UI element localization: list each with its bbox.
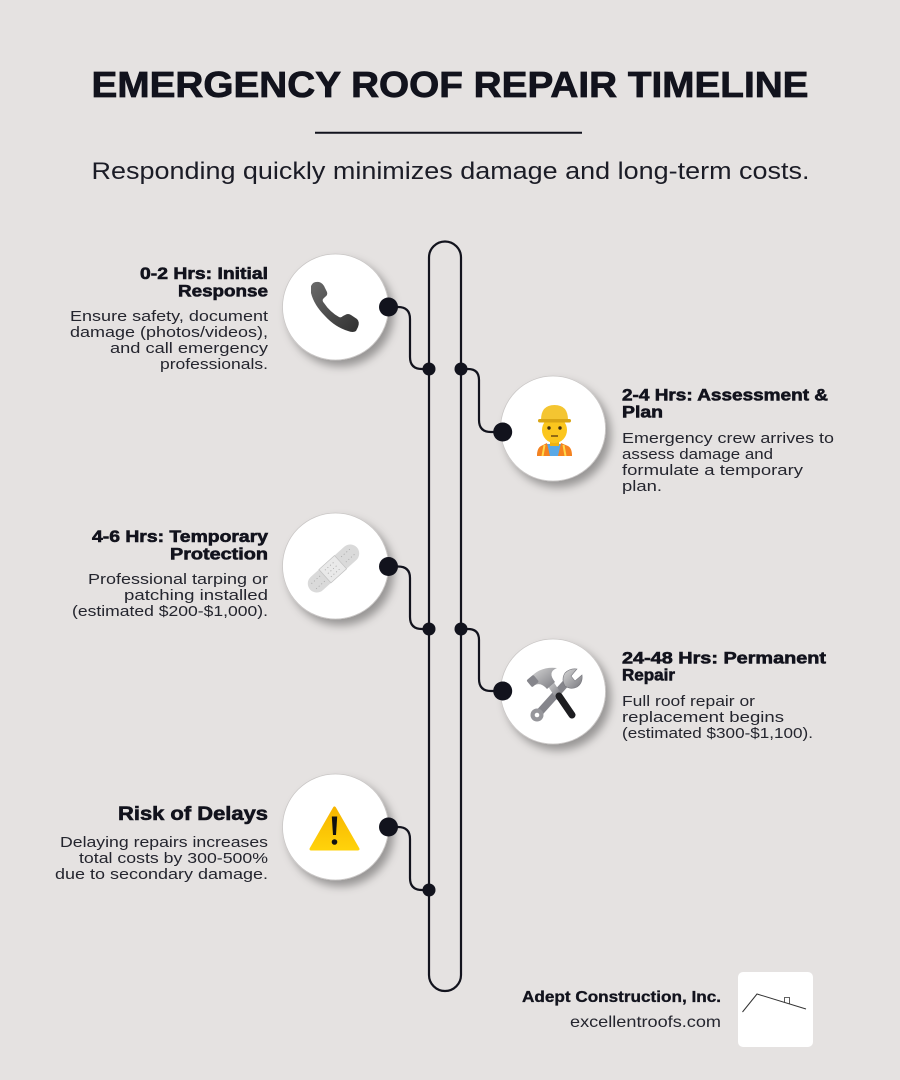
connector: 2-4 hours — [454, 362, 512, 442]
step: 0-2 hours — [70, 254, 436, 376]
heading: 24-48 hours: Repair — [622, 666, 676, 684]
description: 2-4 hours: Emergency crew arrives to — [622, 430, 834, 447]
connector: risk of delays — [379, 818, 436, 896]
description: 4-6 hours: Professional tarping or — [88, 571, 268, 588]
subtitle: Responding quickly minimizes damage and long-term costs. — [92, 158, 810, 185]
description: risk of delays — [55, 834, 268, 883]
heading: 4-6 hours: Protection — [170, 546, 268, 564]
heading: 0-2 hours: Response — [178, 282, 268, 300]
description: 24-48 hours: (estimated $300-$1,100). — [622, 725, 813, 742]
description: 24-48 hours: Full roof repair or — [622, 693, 755, 710]
connector: 4-6 hours — [379, 557, 436, 636]
heading: risk of delays: Risk of Delays — [118, 804, 268, 825]
step: 4-6 hours — [72, 513, 436, 636]
heading: 0-2 hours — [140, 265, 268, 300]
title: EMERGENCY ROOF REPAIR TIMELINE — [92, 64, 808, 105]
description: 2-4 hours: plan. — [622, 478, 662, 495]
description: 2-4 hours — [622, 430, 834, 495]
description: 4-6 hours: patching installed — [124, 587, 268, 604]
description: 2-4 hours: assess damage and — [622, 446, 773, 463]
description: 4-6 hours: (estimated $200-$1,000). — [72, 603, 268, 620]
footer: company name: Adept Construction, Inc. — [522, 989, 721, 1006]
connector: 0-2 hours — [379, 298, 436, 376]
heading: 2-4 hours: 2-4 Hrs: Assessment & — [622, 386, 828, 404]
logo — [738, 972, 813, 1047]
description: risk of delays: total costs by 300-500% — [79, 850, 268, 867]
icon: warning triangle — [282, 774, 388, 880]
connector: 24-48 hours — [454, 622, 512, 700]
icon: bandage — [282, 513, 388, 619]
central timeline track — [429, 242, 461, 991]
description: 24-48 hours: replacement begins — [622, 709, 784, 726]
icon: hammer and wrench — [500, 639, 606, 744]
heading: 2-4 hours: Plan — [622, 404, 663, 422]
description: risk of delays: due to secondary damage. — [55, 866, 268, 883]
step: risk of delays — [55, 774, 436, 896]
description: 0-2 hours: damage (photos/videos), — [70, 324, 268, 341]
footer: website: excellentroofs.com — [570, 1014, 721, 1031]
description: 0-2 hours: Ensure safety, document — [70, 308, 269, 325]
heading: 4-6 hours: 4-6 Hrs: Temporary — [92, 528, 269, 546]
description: 24-48 hours — [622, 693, 813, 742]
step: 2-4 hours — [454, 362, 834, 495]
step: 24-48 hours — [454, 622, 827, 744]
icon: telephone — [282, 254, 388, 360]
description: risk of delays: Delaying repairs increases — [60, 834, 268, 851]
icon: construction worker — [500, 376, 606, 481]
heading: 0-2 hours: 0-2 Hrs: Initial — [140, 265, 268, 283]
description: 4-6 hours — [72, 571, 268, 620]
description: 2-4 hours: formulate a temporary — [622, 462, 804, 479]
description: 0-2 hours — [70, 308, 269, 373]
heading: 24-48 hours — [622, 650, 827, 684]
heading: 4-6 hours — [92, 528, 269, 564]
description: 0-2 hours: and call emergency — [110, 340, 269, 357]
heading: 24-48 hours: 24-48 Hrs: Permanent — [622, 650, 827, 668]
description: 0-2 hours: professionals. — [160, 356, 268, 373]
heading: 2-4 hours — [622, 386, 828, 422]
